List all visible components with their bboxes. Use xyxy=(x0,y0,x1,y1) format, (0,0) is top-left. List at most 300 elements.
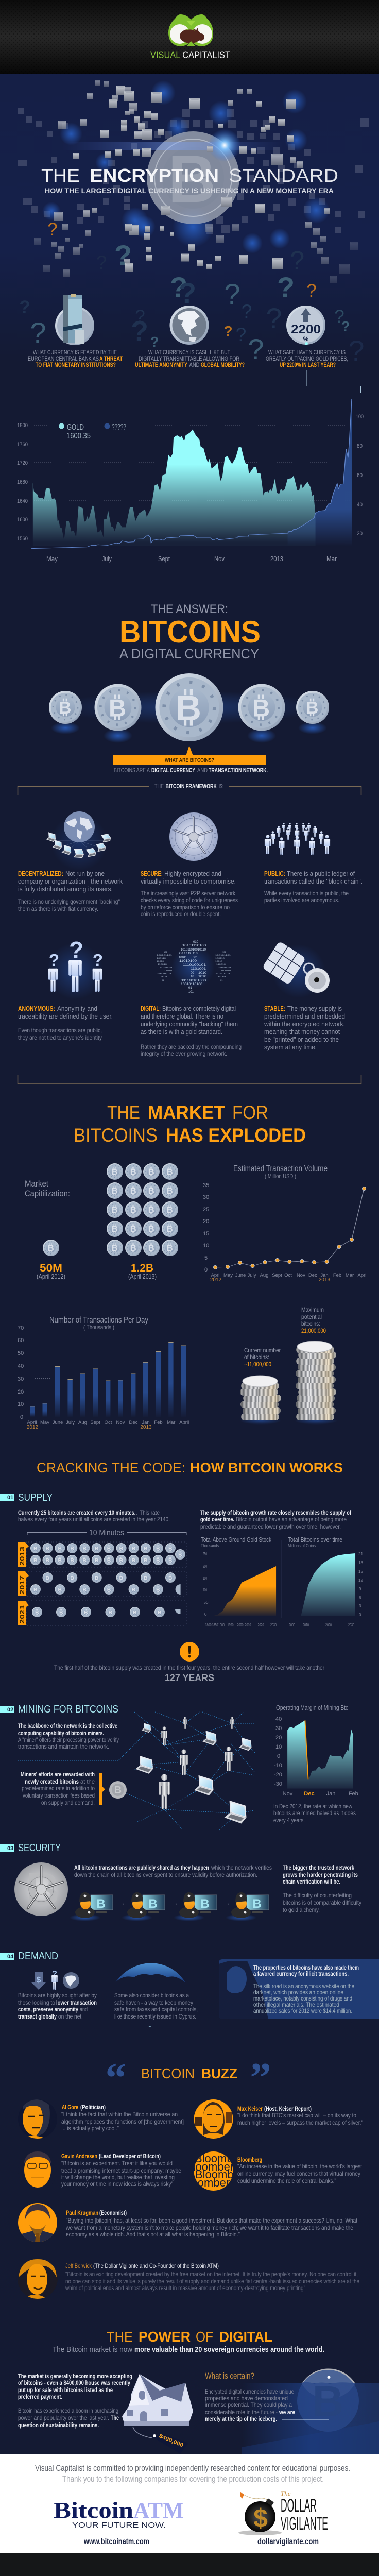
panel: question 3 price rise xyxy=(266,306,348,368)
heading: the answer: BITCOINS xyxy=(119,615,261,649)
supply text right xyxy=(200,1509,352,1530)
month labels: Jan xyxy=(142,1420,150,1426)
figures: 1.2B xyxy=(131,1262,153,1274)
verification chain: → xyxy=(171,1899,178,1907)
chart: gold stock: 150 xyxy=(203,1576,207,1581)
icon: binary coins: 01 xyxy=(188,987,192,990)
y axis labels: 10 xyxy=(18,1401,24,1408)
text block xyxy=(264,1005,345,1051)
question text: WHAT CURRENCY IS CASH LIKE BUT xyxy=(148,349,230,356)
quote text xyxy=(65,2209,358,2238)
data points xyxy=(213,1187,366,1269)
panel: market capitalization: Capitilization: xyxy=(25,1189,70,1198)
icon: 2200 percent badge: % xyxy=(303,335,309,343)
panel: secure xyxy=(141,812,238,918)
decorative question marks: ? xyxy=(341,318,350,334)
quote text xyxy=(61,2153,181,2188)
quote text: algorithm replaces the functions of [the government] xyxy=(61,2118,184,2125)
text block: virtually impossible to compromise. xyxy=(141,877,236,885)
subheading: more valuable than 20 sovereign currencies around the world. xyxy=(134,2345,324,2354)
section tab xyxy=(0,1492,53,1503)
month labels: Sept xyxy=(90,1420,100,1426)
demand text: and xyxy=(80,2006,88,2013)
quote text xyxy=(65,2262,359,2292)
decorative question marks: ? xyxy=(306,281,317,301)
question text: GLOBAL MOBILITY? xyxy=(201,361,245,368)
figures: (April 2013) xyxy=(128,1273,157,1280)
section tab: 01 xyxy=(7,1495,13,1501)
month labels: April xyxy=(357,1273,368,1278)
logo wordmark: VISUAL CAPITALIST xyxy=(150,50,230,61)
chart: gold stock: 1800 xyxy=(205,1623,212,1628)
quote: Bloomberg xyxy=(181,2151,363,2191)
decorative question marks: ? xyxy=(135,307,145,327)
icon: binary coins: 100101101 xyxy=(215,954,231,956)
month labels: May xyxy=(40,1420,49,1426)
time axis labels: July xyxy=(102,555,112,563)
lens flare streak xyxy=(62,129,283,162)
label: current bitcoins: Current number xyxy=(244,1347,281,1354)
bar caps xyxy=(30,1342,186,1406)
quote text: Max Keiser xyxy=(237,2105,263,2112)
panel: market capitalization: Market xyxy=(25,1179,48,1189)
row: 2017 issuance: 2017 xyxy=(19,1575,26,1595)
callout: what are bitcoins: TRANSACTION NETWORK. xyxy=(209,767,268,774)
icon: large faded bitcoin coin xyxy=(147,131,239,224)
callout: what are bitcoins: AND xyxy=(197,767,208,774)
left axis labels: 1680 xyxy=(17,479,28,485)
icon: binary coins: 100101101 xyxy=(157,954,173,956)
section tab: 02 xyxy=(7,1707,13,1713)
portrait xyxy=(194,2099,233,2139)
mining text: computing capability of bitcoin miners. xyxy=(18,1730,104,1737)
icon: binary coins: 10010110100 xyxy=(181,983,203,986)
heading: bitcoin buzz xyxy=(105,2054,271,2101)
security side text: to gold alchemy. xyxy=(283,1906,320,1913)
ten minutes bracket: 10 Minutes xyxy=(89,1529,124,1537)
sponsor logo: Bitcoin ATM: ATM xyxy=(133,2498,184,2523)
chart: gold stock: 1850 xyxy=(212,1623,218,1628)
icon: tall coin stack xyxy=(295,1341,338,1425)
question text: UP 2200% IN LAST YEAR? xyxy=(280,361,336,368)
icon: binary coins: 011010 xyxy=(163,969,173,972)
label: current bitcoins: ~11,000,000 xyxy=(244,1361,271,1368)
icon: binary coins: 00 xyxy=(191,972,194,975)
panel: public xyxy=(264,823,363,904)
sponsor logo: Dollar Vigilante xyxy=(238,2489,328,2546)
text: miners rewarded: predetermined rate in addition to xyxy=(22,1785,95,1792)
chart: transactions per day: 2013 xyxy=(140,1425,152,1430)
quote text: (Politician) xyxy=(80,2104,106,2111)
y axis labels xyxy=(203,1182,209,1273)
month labels xyxy=(211,1273,368,1278)
arrow to reward coin xyxy=(99,1773,105,1805)
label: maximum bitcoins: potential xyxy=(301,1313,322,1320)
security side text: The difficulty of counterfeiting xyxy=(283,1892,352,1899)
demand text: lower transaction xyxy=(56,1999,97,2006)
text: what is certain: What is certain? xyxy=(205,2371,254,2381)
icon: binary coins: 011010 xyxy=(221,969,231,972)
chart: bitcoins over time: 18 xyxy=(358,1561,363,1565)
icon: bitcoin vault xyxy=(14,1862,68,1916)
supply text right: Bitcoin output have an advantage of being more xyxy=(236,1516,347,1523)
icon: faceless figures: ? xyxy=(69,937,83,963)
label: maximum bitcoins xyxy=(301,1306,326,1334)
quote text: online currency, may fuel concerns that virtual money xyxy=(237,2170,360,2177)
panel: illicit transactions: annualized sales for 2012 were $14.4 million. xyxy=(253,2007,352,2014)
icon: 2200 percent badge xyxy=(286,306,325,345)
text: market acceptance: of bitcoins - even a $400,000 house was recently xyxy=(18,2379,130,2386)
icon: umbrella xyxy=(115,1961,185,2027)
question text: WHAT SAFE HAVEN CURRENCY IS xyxy=(268,349,346,356)
sponsor logo: Dollar Vigilante: dollarvigilante.com xyxy=(257,2537,319,2546)
coin row xyxy=(49,673,329,743)
security side text xyxy=(283,1864,361,1913)
row: 2021 issuance: 2021 xyxy=(19,1605,26,1624)
sponsor logo: Bitcoin ATM: www.bitcoinatm.com xyxy=(83,2537,149,2546)
time axis labels: Nov xyxy=(214,555,225,563)
y axis labels: 60 xyxy=(18,1337,24,1344)
quote text: could undermine the role of central banks." xyxy=(237,2177,336,2184)
supply text right: predictable and guaranteed lower growth over time, however. xyxy=(200,1523,341,1530)
chart: operating margin: Nov xyxy=(283,1791,293,1797)
quote text: whim of political ends and almost always result in massive amount of economy-destroying money printing" xyxy=(65,2284,305,2292)
portrait xyxy=(18,2203,57,2242)
icon: lower fees, anonymity, global: $ xyxy=(37,1976,41,1985)
text block: as there is with a gold standard. xyxy=(141,1028,222,1036)
heading: bitcoin buzz: BITCOIN xyxy=(141,2065,195,2081)
portrait xyxy=(18,2259,58,2300)
chart: operating margin: Dec xyxy=(304,1791,315,1797)
time axis labels: 2013 xyxy=(270,555,283,563)
icon: Visual Capitalist logo xyxy=(168,14,213,46)
chart: bitcoins over time: 2000 xyxy=(289,1623,295,1628)
legend: ????? xyxy=(112,423,126,432)
y axis labels: 25 xyxy=(203,1207,209,1213)
panel: illicit transactions: other illegal materials. The estimated xyxy=(253,2001,339,2008)
chart: bitcoins over time: 2030 xyxy=(348,1623,354,1628)
quote: Gavin Andresen xyxy=(24,2151,181,2188)
text block xyxy=(141,1005,242,1057)
callout: 127 years: The first half of the bitcoin supply was created in the first four years, the entire second half however will take another xyxy=(54,1664,324,1671)
panel: illicit transactions: marketplace, notably consisting of drugs and xyxy=(253,1995,352,2002)
chart: bitcoins over time: 2010 xyxy=(303,1623,309,1628)
chart: gold stock: 0 xyxy=(204,1612,207,1617)
month labels: April xyxy=(179,1420,189,1426)
icon: single coin xyxy=(43,1240,59,1256)
row: 2021 issuance xyxy=(18,1601,186,1625)
section tab: SUPPLY xyxy=(18,1492,53,1503)
text block: within the encrypted network, xyxy=(264,1020,345,1028)
icon: faceless figures: ? xyxy=(49,951,59,970)
text block: be "printed" or added to the xyxy=(264,1036,339,1043)
text block: The money supply is xyxy=(287,1005,342,1012)
callout: what are bitcoins: BITCOINS ARE A xyxy=(114,767,150,774)
chart: gold stock: 2000 xyxy=(237,1623,244,1628)
icon: binary coins: 101 xyxy=(188,991,194,994)
verification chain: → xyxy=(118,1899,125,1907)
y axis labels: 35 xyxy=(203,1182,209,1189)
month labels: Nov xyxy=(297,1273,305,1278)
month labels: June xyxy=(53,1420,63,1426)
header band xyxy=(0,0,379,74)
heading: the answer: THE ANSWER: xyxy=(151,602,228,616)
icon: binary coins: 1010 xyxy=(198,975,207,978)
chart: gold stock: 50 xyxy=(204,1600,209,1605)
text: market acceptance xyxy=(18,2372,132,2429)
decorative question marks: ? xyxy=(248,333,264,365)
verification chain xyxy=(70,1892,269,1921)
quote text: your money or time in new ideas is always risky" xyxy=(61,2180,173,2188)
time axis labels: May xyxy=(46,555,58,563)
text: what is certain: merely at the tip of the iceberg. xyxy=(205,2415,277,2422)
callout: what are bitcoins: DIGITAL CURRENCY xyxy=(151,767,195,774)
sponsor logo: Dollar Vigilante: $ xyxy=(253,2504,268,2533)
quote text: (Lead Developer of Bitcoin) xyxy=(99,2153,161,2160)
month labels: Oct xyxy=(105,1420,112,1426)
chart: estimated transaction volume: Estimated Transaction Volume xyxy=(233,1164,328,1173)
quote text xyxy=(237,2105,363,2126)
section tab xyxy=(0,1842,61,1854)
portrait: wordmark collage: Bloomberg xyxy=(181,2176,236,2189)
y axis labels xyxy=(18,1325,24,1420)
chart: bitcoins over time: 21 xyxy=(358,1552,363,1556)
icon: binary coins: 110010 xyxy=(158,963,167,965)
month labels: June xyxy=(235,1273,246,1278)
margin note: every 4 years. xyxy=(273,1817,305,1824)
label: maximum bitcoins: 21,000,000 xyxy=(301,1327,326,1334)
text: market acceptance: The market is generally becoming more accepting xyxy=(18,2372,132,2380)
question text: A THREAT xyxy=(99,355,123,362)
y axis labels: 40 xyxy=(18,1363,24,1369)
bracket: bitcoin framework: BITCOIN FRAMEWORK xyxy=(166,783,217,790)
panel: illicit transactions: darknet, which provides an open online xyxy=(253,1989,343,1996)
text: what is certain: Encrypted digital currencies have unique xyxy=(205,2388,294,2395)
text: what is certain: properties and have demonstrated xyxy=(205,2395,288,2402)
question text: EUROPEAN CENTRAL BANK AS xyxy=(28,355,99,362)
subheading xyxy=(53,2345,324,2354)
text: market acceptance: Bitcoin has experienced a boom in purchasing xyxy=(18,2407,118,2414)
section tab: 04 xyxy=(7,1954,14,1960)
chart: gold stock: 2010 xyxy=(245,1623,251,1628)
decorative question marks: ? xyxy=(290,246,304,275)
quote text: Paul Krugman xyxy=(66,2209,98,2216)
icon: hooded figure xyxy=(219,1961,268,2019)
chart: bitcoins over time: 6 xyxy=(359,1596,361,1600)
figures: 50M xyxy=(40,1262,62,1274)
icon: binary coins: 10010 xyxy=(215,960,223,962)
chart: operating margin: -30 xyxy=(274,1781,282,1787)
decorative question marks: ? xyxy=(47,219,58,240)
month labels: Jan xyxy=(320,1273,329,1278)
safe haven text xyxy=(114,1992,198,2020)
area: gold price xyxy=(33,429,316,546)
text block: predetermined and embedded xyxy=(264,1012,345,1020)
question text xyxy=(135,349,245,368)
legend: 1600.35 xyxy=(66,432,91,440)
text block: by bruteforce comparison to ensure no xyxy=(141,904,230,911)
text block xyxy=(18,1005,113,1041)
security text: which the network verifies xyxy=(211,1864,272,1871)
text: market acceptance: put up for sale with bitcoins listed as the xyxy=(18,2386,113,2394)
icon: binary coins: 10101110100 xyxy=(182,944,206,947)
icon: binary coins: 10110101 xyxy=(157,972,172,975)
callout: what are bitcoins xyxy=(113,745,268,774)
quote text: treat a promising internet start-up company: maybe xyxy=(61,2167,181,2174)
demand text: Bitcoins are highly sought after by xyxy=(18,1992,97,1999)
quote text: Jeff Berwick xyxy=(65,2262,92,2269)
icon: faceless figures: ? xyxy=(93,951,103,970)
quote text: "Bitcoin is an experiment. Treat it like you would xyxy=(61,2160,173,2167)
mining text: transactions and maintain the network. xyxy=(18,1743,109,1750)
legend: GOLD xyxy=(67,423,84,432)
panel: question 1 building xyxy=(28,294,123,368)
question text: AND xyxy=(190,361,200,368)
left axis labels: 1600 xyxy=(17,517,28,523)
icon: binary coins: 10 xyxy=(191,975,194,978)
text: what is certain: considerable role in the future - xyxy=(205,2409,278,2416)
decorative question marks: ? xyxy=(150,334,159,350)
chart: operating margin: 30 xyxy=(275,1725,282,1732)
decorative question marks: ? xyxy=(170,271,187,303)
chart: gold stock: 250 xyxy=(203,1552,207,1556)
decorative question marks: ? xyxy=(114,239,132,272)
icon: binary coins: 10011 xyxy=(179,956,187,959)
chart: estimated transaction volume: ( Million USD ) xyxy=(265,1173,296,1180)
icon: house with price tag xyxy=(122,2374,193,2454)
question text: DIGITALLY TRANSMITTABLE ALLOWING FOR xyxy=(139,355,239,362)
icon: large faded bitcoin coin: B xyxy=(168,141,216,216)
panel: market capitalization xyxy=(25,1163,178,1280)
y axis labels: 20 xyxy=(18,1389,24,1395)
heading: the answer xyxy=(119,602,261,662)
icon: binary coins: 101011010010110 xyxy=(181,948,206,952)
chart: estimated transaction volume: 2013 xyxy=(319,1277,331,1283)
sponsor statement xyxy=(35,2463,350,2484)
faded pixel squares xyxy=(18,108,369,234)
icon: globe with laptops xyxy=(46,811,112,871)
quote text: ... is actually pretty cool." xyxy=(61,2125,119,2132)
chart: bitcoins over time: 9 xyxy=(359,1587,361,1591)
text: miners rewarded: voluntary transaction fees based xyxy=(23,1792,95,1799)
icon: bitcoin iceberg: B xyxy=(313,2377,343,2426)
heading: cracking the code: CRACKING THE CODE: xyxy=(37,1460,185,1476)
safe haven text: like those recently issued in Cyprus. xyxy=(114,2013,196,2020)
chart: transactions per day: ( Thousands ) xyxy=(83,1324,114,1331)
chart: bitcoins over time: 0 xyxy=(359,1613,361,1617)
panel: illicit transactions xyxy=(219,1959,379,2019)
decorative question marks: ? xyxy=(236,324,246,345)
quote text: "I do think that BTC's market cap will – on its way to xyxy=(237,2112,356,2119)
section: supply xyxy=(0,1492,363,1684)
text block: transactions called the "block chain". xyxy=(264,877,363,885)
chart: operating margin xyxy=(274,1704,358,1797)
heading: the power of digital: THE xyxy=(107,2329,133,2345)
text: market acceptance: power and popularity over the last year. xyxy=(18,2414,109,2421)
y axis labels: 30 xyxy=(203,1194,209,1200)
margin note: In Dec 2012, the rate at which new xyxy=(273,1803,352,1810)
panel: water and iceberg background xyxy=(242,2383,379,2454)
right axis labels: 100 xyxy=(356,414,364,420)
chart: bitcoins over time: 3 xyxy=(359,1604,361,1608)
portrait xyxy=(24,2151,51,2188)
quote text: (The Dollar Vigilante and Co-Founder of the Bitcoin ATM) xyxy=(93,2262,219,2269)
chart: gold stock: 2020 xyxy=(257,1623,264,1628)
icon: binary coins: 0110 xyxy=(218,975,226,978)
decorative question marks: ? xyxy=(266,302,282,334)
bars xyxy=(30,1343,186,1417)
section tab: DEMAND xyxy=(18,1951,58,1962)
portrait: wordmark collage: Bloomberg xyxy=(195,2152,249,2165)
portrait: wordmark collage xyxy=(194,2151,233,2191)
figures xyxy=(37,1262,157,1280)
sponsor logo: Dollar Vigilante: The xyxy=(281,2489,291,2497)
left axis labels: 1560 xyxy=(17,536,28,542)
text block: them as there is with fiat currency. xyxy=(18,905,98,912)
chart: operating margin: Operating Margin of Mining Btc xyxy=(276,1704,348,1711)
icon: bitcoin iceberg xyxy=(282,2368,359,2432)
decorative question marks: ? xyxy=(96,252,107,273)
time axis labels: Mar xyxy=(326,555,337,563)
icon: binary coins: 01110 xyxy=(179,952,191,955)
supply text left: This rate xyxy=(140,1509,160,1516)
month labels: Feb xyxy=(333,1273,341,1278)
icon: binary coins: 110 xyxy=(193,952,198,955)
text: miners rewarded: Miners' efforts are rewarded with xyxy=(21,1771,95,1778)
chart: operating margin: Jan xyxy=(326,1791,335,1797)
heading: cracking the code: HOW BITCOIN WORKS xyxy=(190,1460,343,1476)
chart: bitcoins over time: Millions of Coins xyxy=(288,1543,316,1548)
chart: bitcoins over time: 12 xyxy=(358,1578,363,1583)
time axis labels xyxy=(46,555,337,563)
demand text: those looking to xyxy=(18,1999,55,2006)
decorative question marks: ? xyxy=(277,271,295,303)
y axis labels: 20 xyxy=(203,1218,209,1225)
network diagram xyxy=(18,1712,255,1831)
supply text left: halves every four years until all coins are created in the year 2140. xyxy=(18,1516,170,1523)
icon: binary coins: 101 xyxy=(222,951,226,953)
icon: binary coins: 01 xyxy=(220,979,223,981)
month labels: April xyxy=(211,1273,221,1278)
demand text: on the net. xyxy=(58,2013,83,2020)
text block: they are not tied to anyone's identity. xyxy=(18,1034,103,1041)
month labels: May xyxy=(223,1273,233,1278)
chart: operating margin: 0 xyxy=(277,1753,280,1759)
month labels: Dec xyxy=(308,1273,317,1278)
chart: bitcoins over time xyxy=(288,1536,363,1628)
panel: anonymous xyxy=(18,937,113,1041)
text block: underlying commodity "backing" them xyxy=(141,1020,238,1028)
text block: company or organization - the network xyxy=(18,877,123,885)
icon: binary coins: 1010110 xyxy=(218,966,231,969)
panel: digital xyxy=(141,941,242,1057)
month labels: Oct xyxy=(284,1273,292,1278)
safe haven text: safe haven - a way to keep money xyxy=(114,1999,193,2006)
ten minutes bracket xyxy=(27,1529,186,1537)
section: security xyxy=(0,1842,361,1921)
data line xyxy=(215,1189,364,1267)
icon: binary coins: 101 xyxy=(164,951,167,953)
mining text: The backbone of the network is the collective xyxy=(18,1722,117,1730)
supply text left: Currently 25 bitcoins are created every 10 minutes.. xyxy=(18,1509,137,1516)
decorative question marks xyxy=(19,219,365,367)
icon: binary coins: 1010 xyxy=(198,972,207,975)
label: current bitcoins: of bitcoins: xyxy=(244,1353,269,1361)
chart: operating margin: -20 xyxy=(274,1772,282,1778)
icon: small coin stack xyxy=(240,1376,281,1425)
heading: main title: THE xyxy=(41,165,80,186)
text block: PUBLIC: xyxy=(264,870,285,877)
